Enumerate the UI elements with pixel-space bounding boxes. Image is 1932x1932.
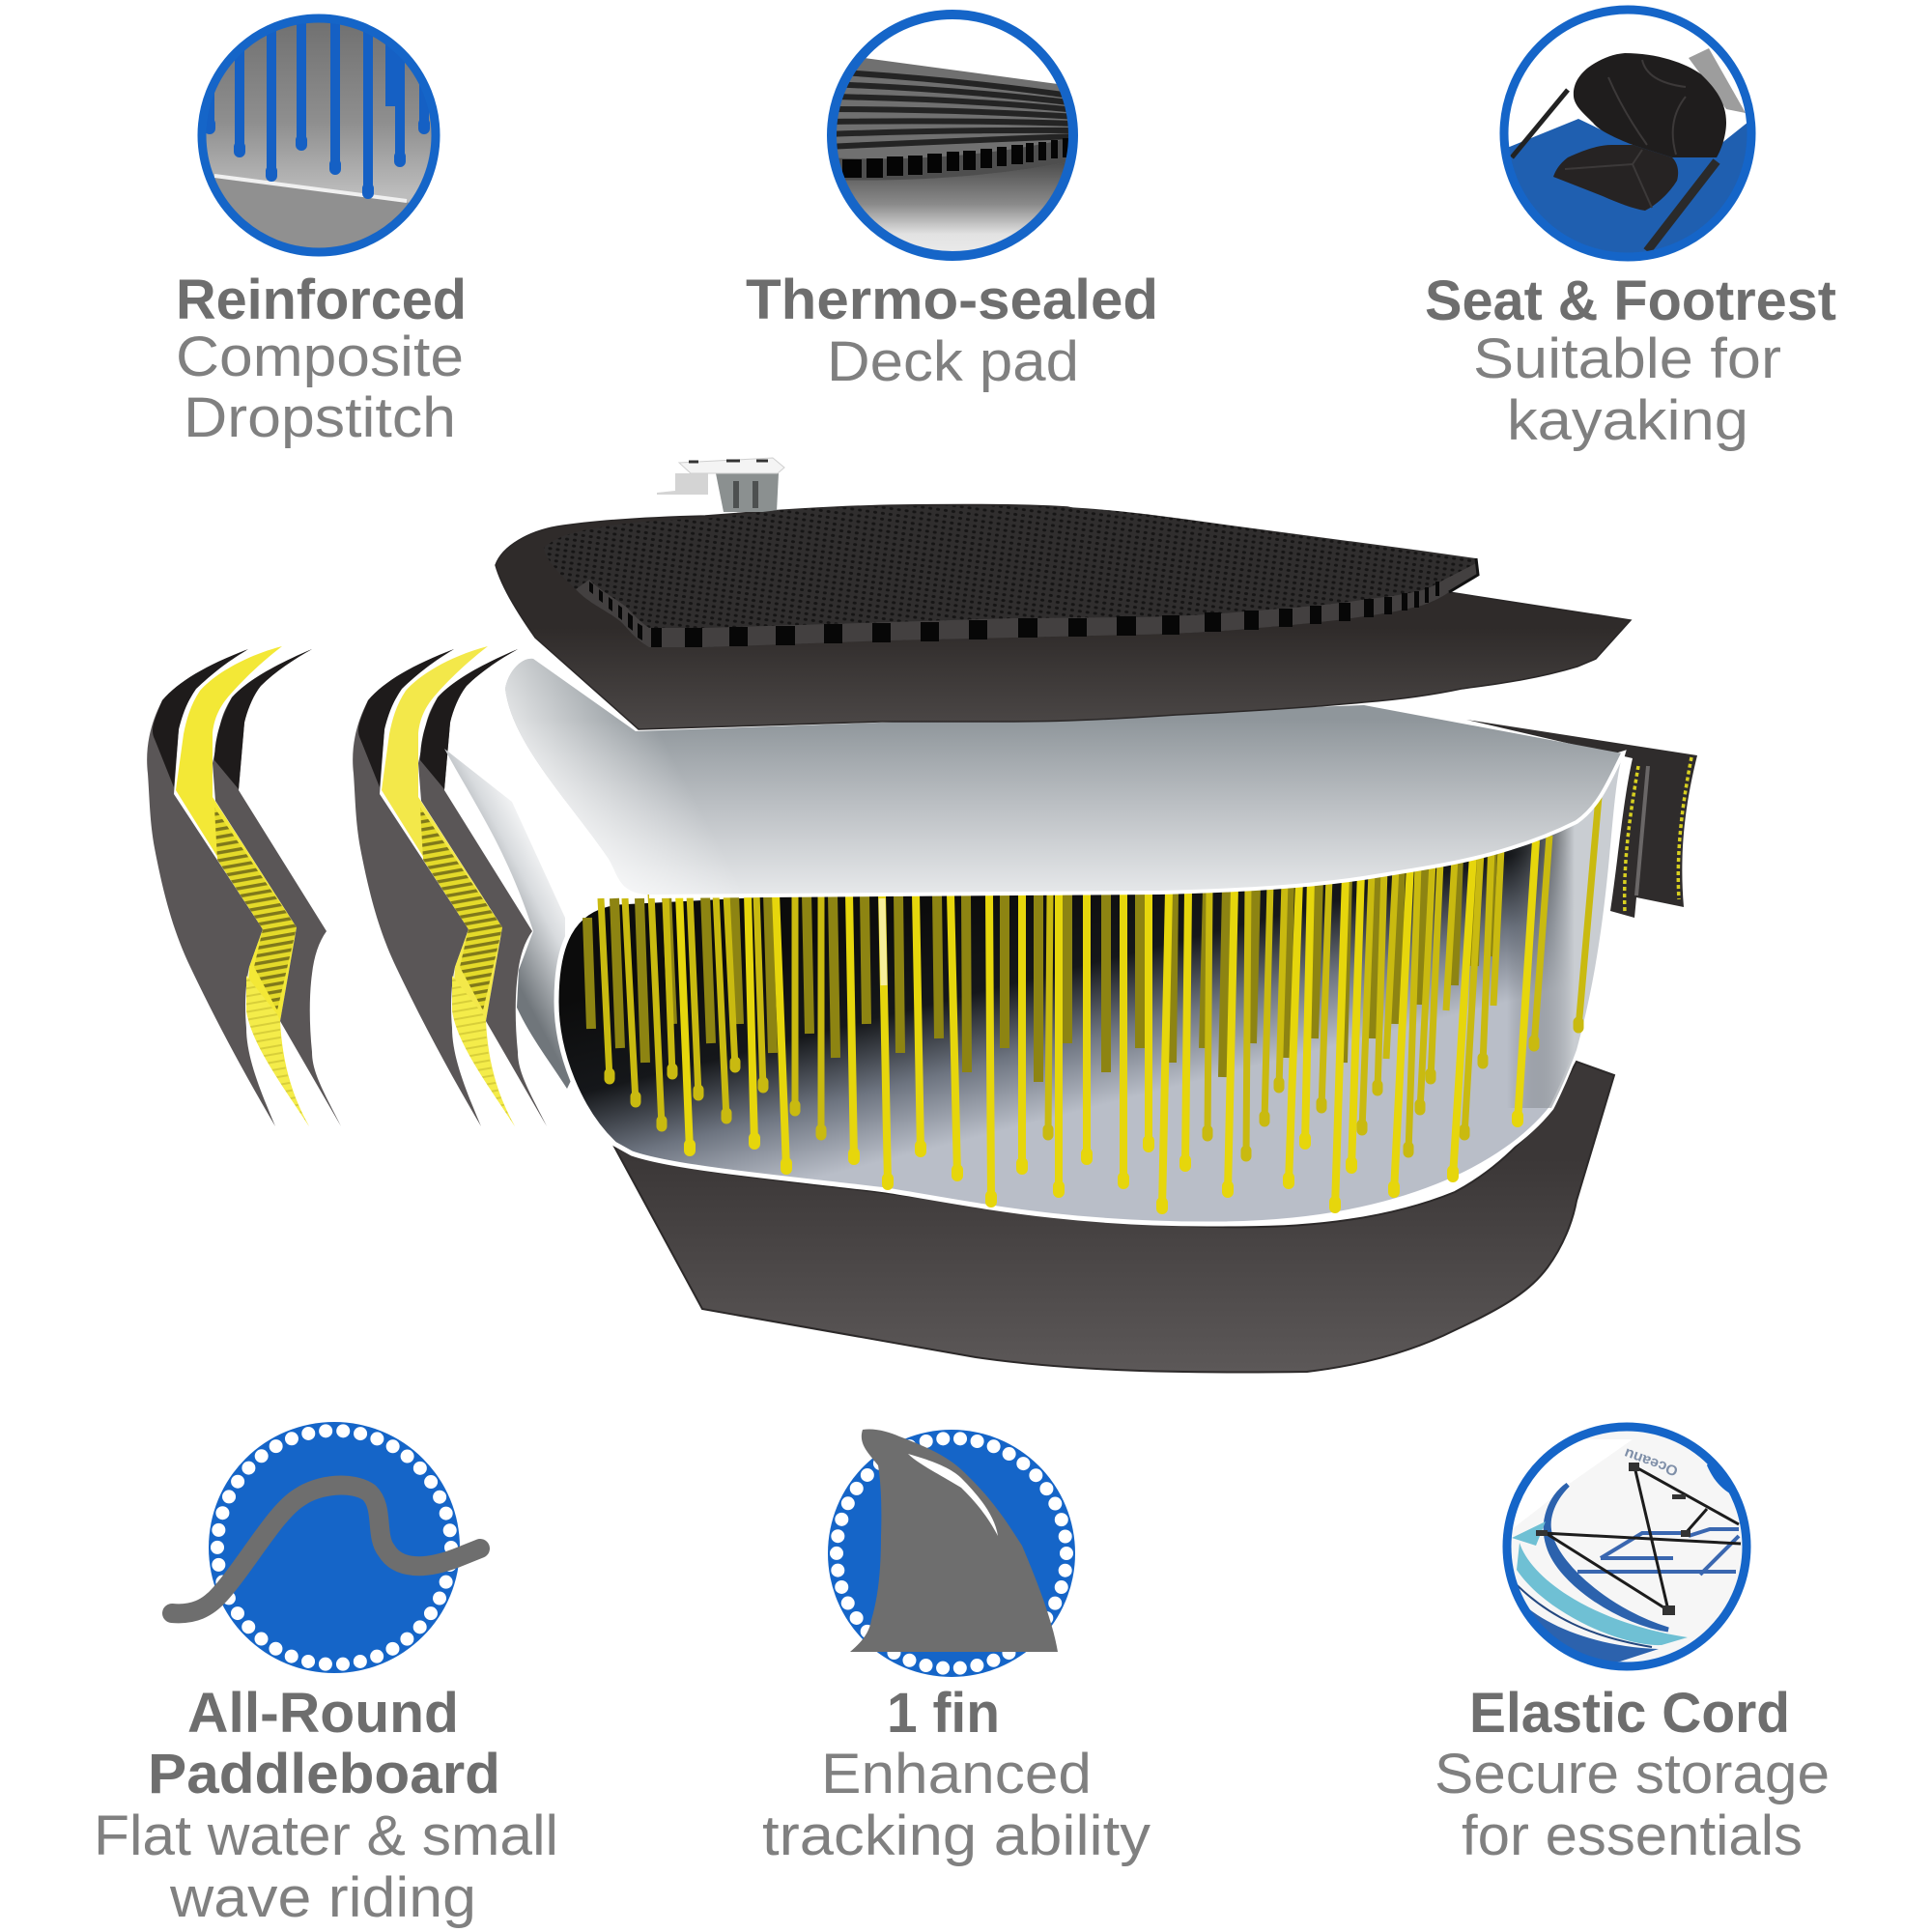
heading: All-Round Paddleboard: All-Round xyxy=(187,1682,459,1745)
text: Enhanced tracking ability: tracking ability xyxy=(762,1804,1151,1867)
deck pad xyxy=(544,506,1478,647)
panel: seat and footrest xyxy=(1425,7,1836,452)
yellow threads: front row xyxy=(679,840,1536,1208)
text: Flat water and small wave riding xyxy=(94,1804,558,1929)
panel: 1 fin xyxy=(762,1429,1151,1867)
text: Deck pad: Deck pad xyxy=(827,330,1079,393)
icon: left layer stack two xyxy=(353,646,547,1126)
text: Flat water and small wave riding: wave riding xyxy=(169,1866,476,1929)
icon: fin on dotted circle xyxy=(828,1429,1075,1677)
left shaded wall xyxy=(444,749,580,1089)
icon: deck pad circle xyxy=(821,12,1082,270)
text: Suitable for kayaking xyxy=(1473,327,1781,452)
text: Enhanced tracking ability: Enhanced xyxy=(821,1743,1092,1805)
icon: kayak seat circle xyxy=(1495,7,1758,270)
heading: All-Round Paddleboard: Paddleboard xyxy=(148,1743,500,1805)
bottom hull sheet xyxy=(614,1062,1614,1372)
text: Composite Dropstitch: Dropstitch xyxy=(184,386,456,449)
text: Secure storage for essentials: for essentials xyxy=(1462,1804,1803,1867)
panel: all-round paddleboard xyxy=(94,1422,558,1929)
icon: left layer stack one xyxy=(147,646,341,1126)
heading: Reinforced: Reinforced xyxy=(176,269,467,331)
heading: Elastic Cord: Elastic Cord xyxy=(1469,1682,1790,1745)
text: Composite Dropstitch xyxy=(176,326,464,449)
yellow threads: back row xyxy=(587,850,1492,1082)
right edge strips with yellow stitching xyxy=(1466,720,1697,918)
yellow threads: middle row xyxy=(601,797,1599,1156)
text: Secure storage for essentials: Secure storage xyxy=(1435,1743,1830,1805)
heading: Seat & Footrest: Seat & Footrest xyxy=(1425,270,1836,332)
air valve xyxy=(657,458,784,512)
top deck sheet xyxy=(496,504,1631,729)
heading: Thermo-sealed: Thermo-sealed xyxy=(746,269,1158,331)
panel: elastic cord xyxy=(1435,1425,1830,1867)
icon: blue dropstitch circle xyxy=(198,16,438,266)
board logo text: Oceanu xyxy=(1622,1444,1680,1479)
icon: wave on dotted circle xyxy=(172,1422,480,1673)
dropstitch chamber xyxy=(556,753,1623,1224)
grey inner sheet xyxy=(505,659,1623,896)
text: Enhanced tracking ability xyxy=(762,1743,1151,1867)
text: Suitable for kayaking: Suitable for xyxy=(1473,327,1781,390)
panel: thermo-sealed deck pad xyxy=(746,12,1158,393)
text: Suitable for kayaking: kayaking xyxy=(1507,389,1748,452)
heading: All-Round Paddleboard xyxy=(148,1682,500,1805)
icon: elastic cord circle xyxy=(1497,1425,1753,1671)
main diagram: board cross-section xyxy=(444,458,1697,1372)
heading: 1 fin: 1 fin xyxy=(887,1682,1000,1745)
text: Flat water and small wave riding: Flat water & small xyxy=(94,1804,558,1867)
deck pad side cells xyxy=(589,582,1439,647)
panel: reinforced composite dropstitch xyxy=(176,16,467,449)
text: Composite Dropstitch: Composite xyxy=(176,326,464,388)
text: Secure storage for essentials xyxy=(1435,1743,1830,1867)
